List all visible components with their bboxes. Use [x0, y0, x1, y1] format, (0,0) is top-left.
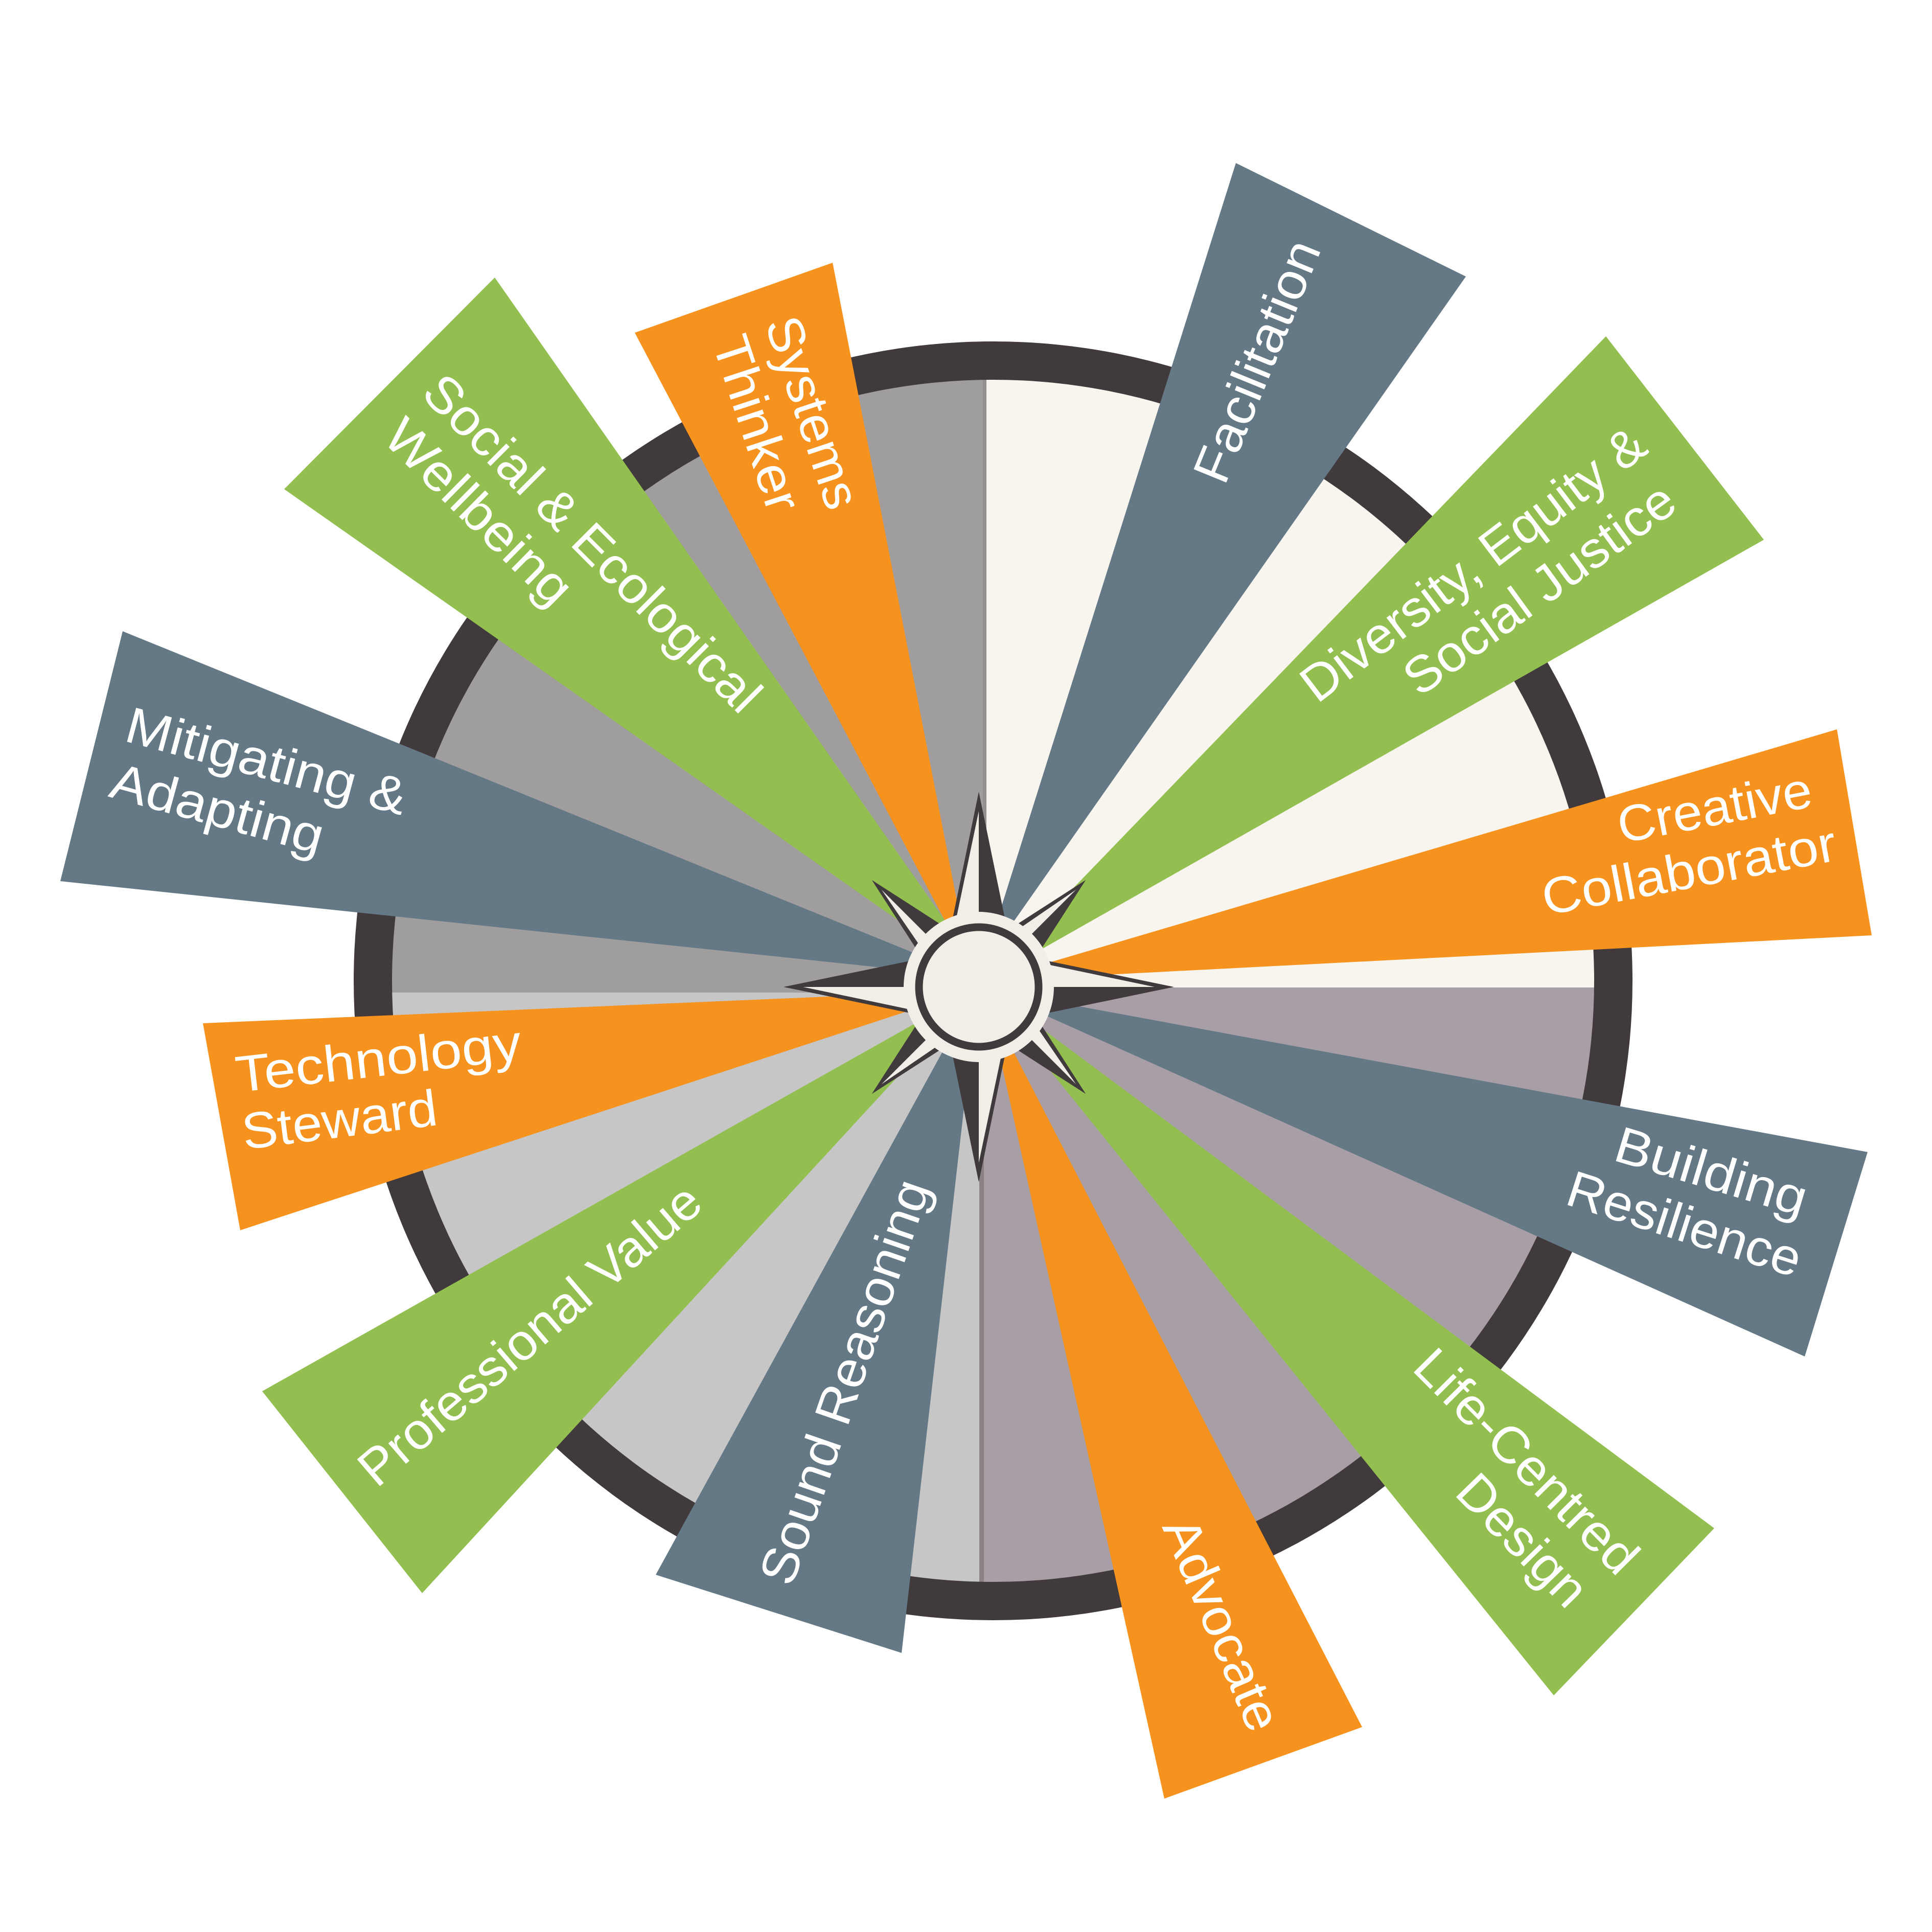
outer dark ring [354, 341, 1632, 1620]
label line 2: Adapting [104, 752, 331, 865]
ray: Facilitation [983, 163, 1466, 965]
ray: Technology Steward [203, 991, 971, 1230]
ray: Systems Thinker [635, 263, 970, 969]
label line 2: Social Justice [1392, 471, 1687, 707]
wheel [354, 341, 1651, 1620]
label line 1: Technology [233, 1014, 524, 1103]
label line 1: Social & Ecological [411, 362, 773, 724]
wedge [987, 729, 1872, 981]
ray: Professional Value [262, 986, 981, 1593]
wedge [981, 336, 1764, 983]
ray: Social & Ecological Wellbeing [284, 278, 990, 985]
label line 2: Steward [239, 1079, 441, 1161]
label line 2: Thinker [701, 328, 813, 519]
ray: Advocate [988, 1002, 1362, 1799]
label: Advocate [1152, 1509, 1293, 1739]
label line 1: Life-Centred [1402, 1337, 1650, 1586]
label line 2: Wellbeing [373, 407, 585, 617]
wedge [988, 1002, 1362, 1799]
wedge [983, 163, 1466, 965]
ray: Sound Reasoning [656, 987, 978, 1653]
ray: Mitigating & Adapting [60, 631, 974, 977]
center disc [904, 912, 1054, 1062]
wheel quadrants [392, 380, 1594, 1582]
label line 1: Diversity, Equity & [1290, 415, 1657, 714]
label line 1: Mitigating & [120, 696, 413, 826]
wedge [656, 987, 978, 1653]
diagonal points [859, 867, 1099, 1107]
compass star [784, 792, 1174, 1182]
wedge [978, 981, 1714, 1695]
ray: Life-Centred Design [978, 981, 1714, 1695]
ray: Diversity, Equity & Social Justice [981, 336, 1764, 983]
wedge [262, 986, 981, 1593]
label line 1: Systems [754, 309, 871, 516]
ray: Building Resilience [988, 990, 1868, 1356]
label line 2: Collaborator [1537, 815, 1841, 927]
cardinal points [784, 792, 1174, 1182]
wedge [284, 278, 990, 985]
wedge [60, 631, 974, 977]
label line 2: Resilience [1560, 1160, 1809, 1288]
label line 1: Building [1608, 1116, 1814, 1227]
label line 1: Creative [1613, 761, 1816, 855]
label line 2: Design [1445, 1462, 1600, 1619]
wedge [988, 990, 1868, 1356]
wedge [635, 263, 970, 969]
label: Professional Value [347, 1172, 712, 1498]
label: Facilitation [1182, 232, 1332, 491]
label: Sound Reasoning [748, 1172, 941, 1592]
wedge [203, 991, 971, 1230]
ray: Creative Collaborator [987, 729, 1872, 981]
